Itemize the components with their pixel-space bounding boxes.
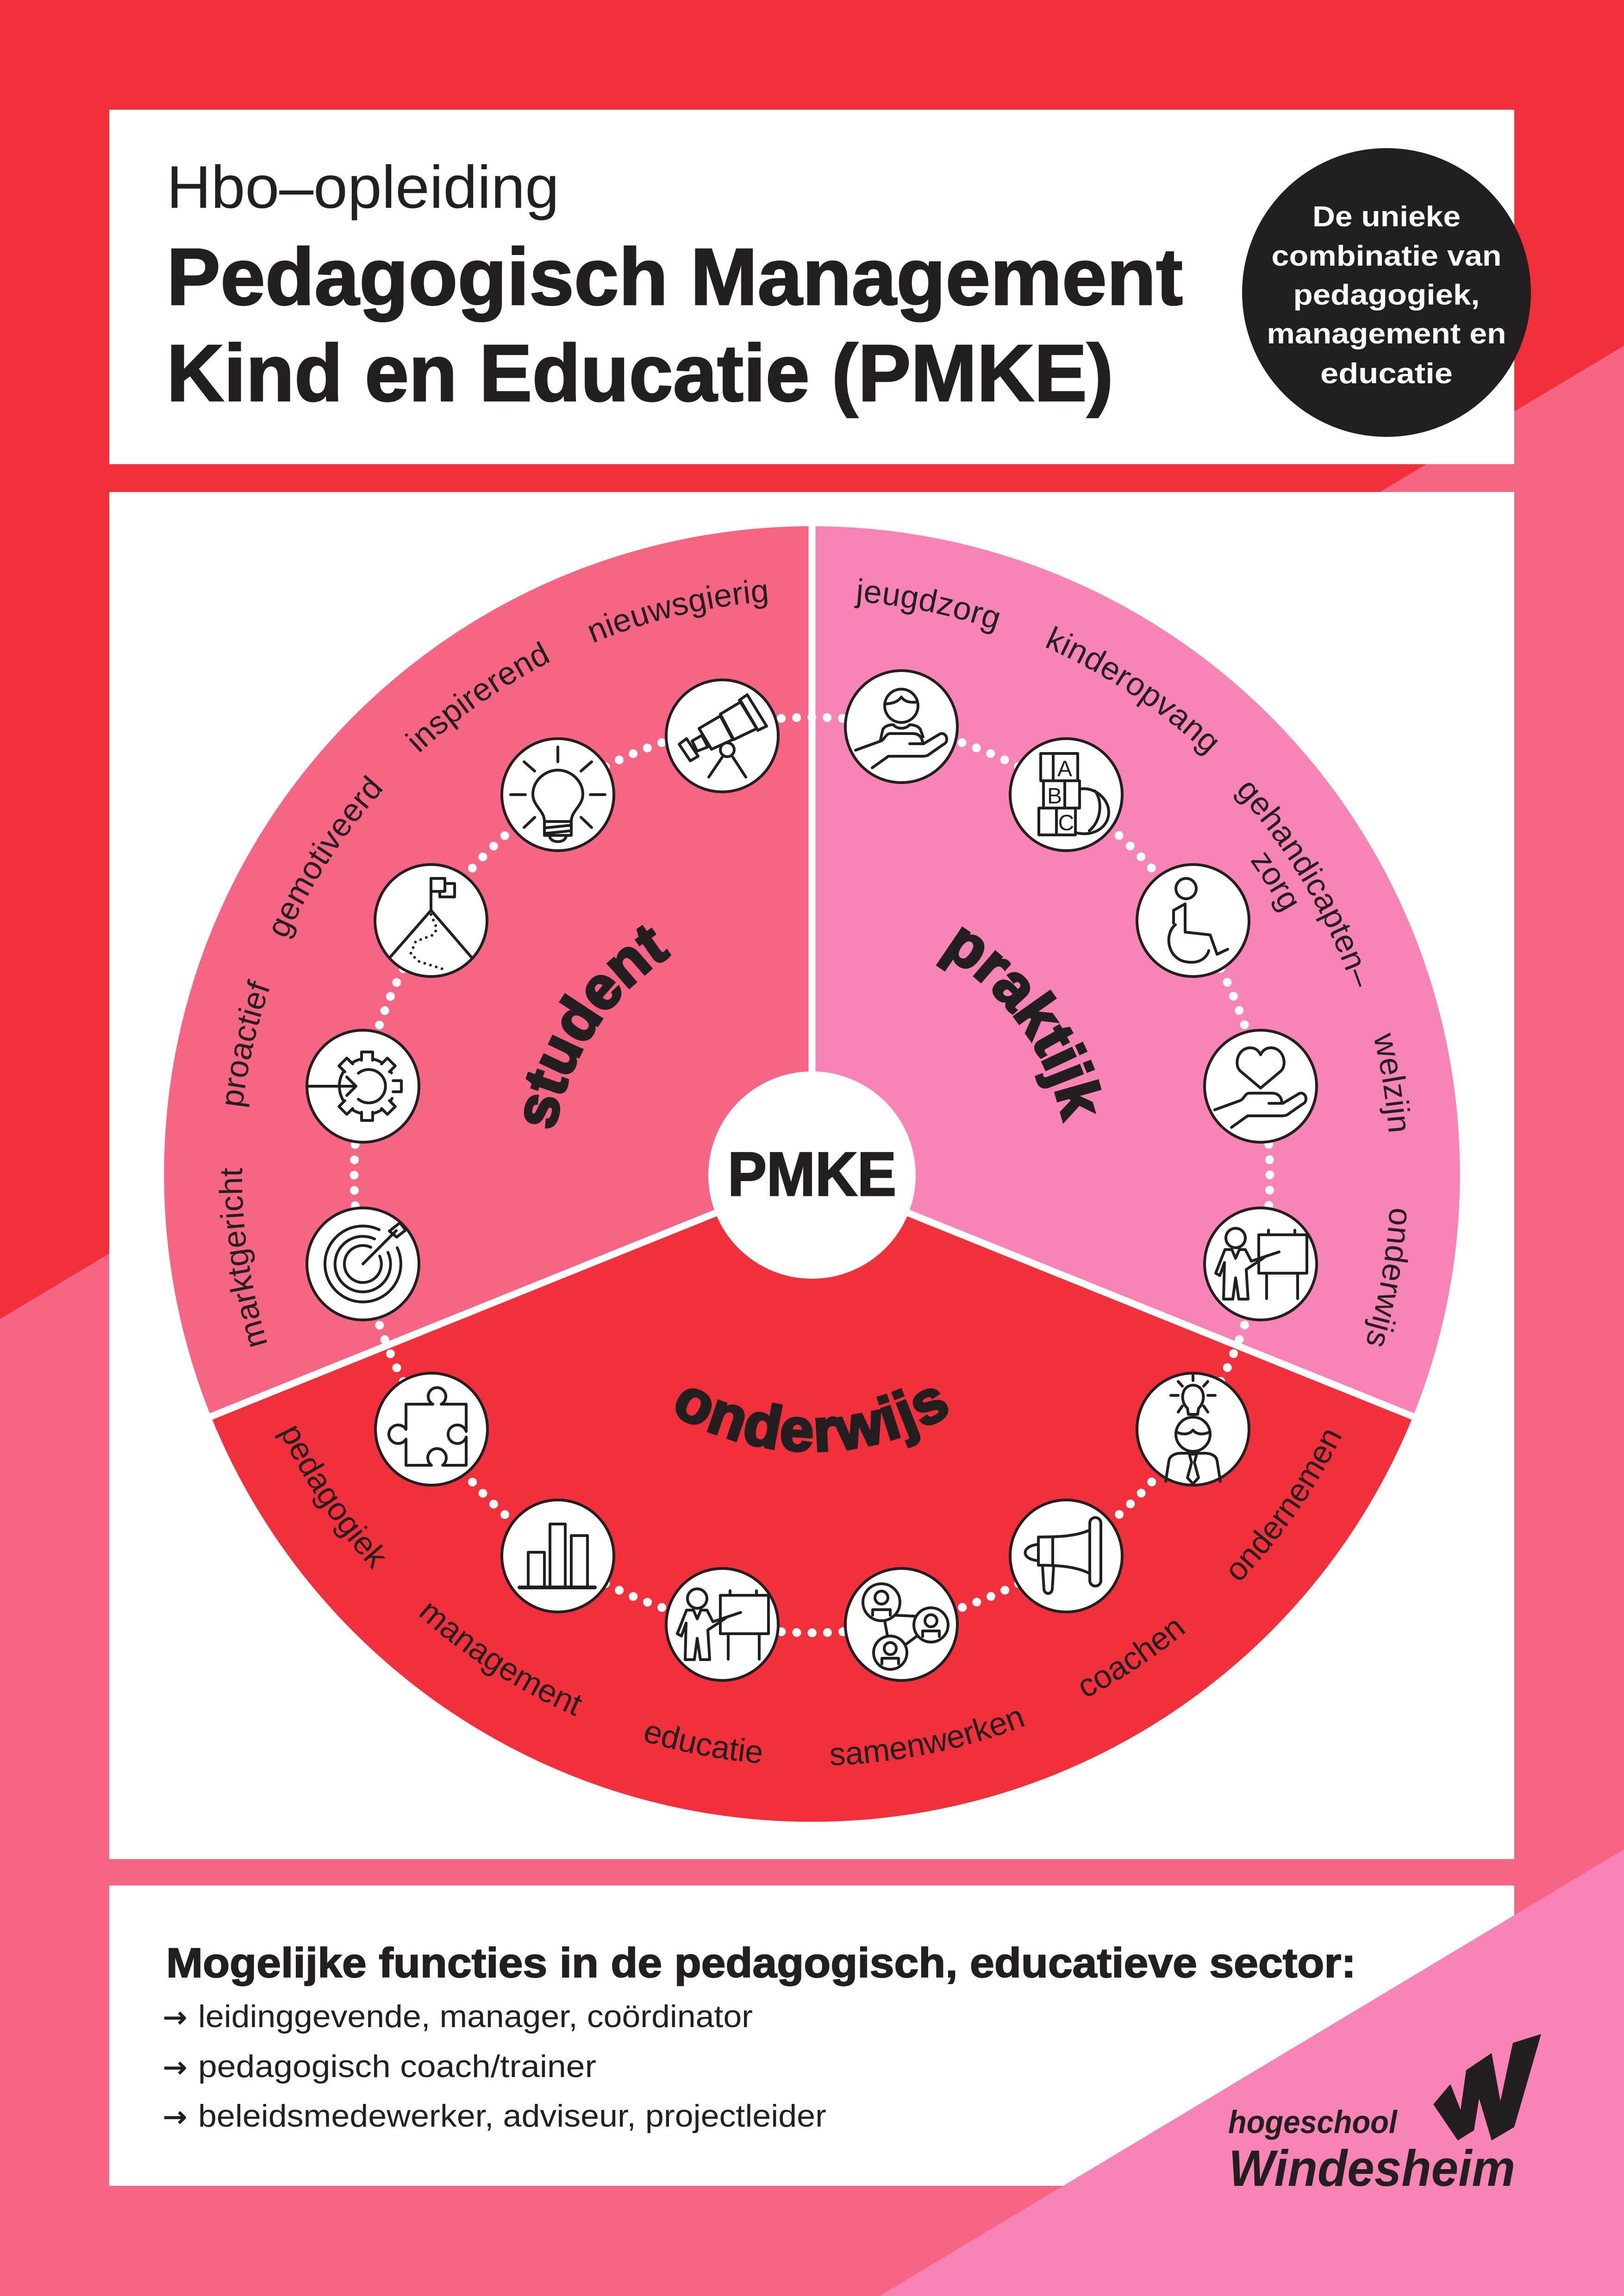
logo wordmark: hogeschool	[1228, 2104, 1398, 2140]
labels: praktijk: onderwijs	[1359, 1207, 1419, 1352]
dotted ring	[354, 717, 1270, 1633]
callout: black circle: De unieke	[1312, 201, 1461, 233]
logo mark	[1433, 2034, 1541, 2140]
logo wordmark	[1228, 2104, 1515, 2197]
functions list	[163, 1999, 826, 2134]
icon: alphabet blocks: A	[1057, 757, 1072, 781]
callout: black circle: pedagogiek,	[1293, 279, 1480, 311]
icon: mountain flag	[375, 865, 487, 977]
icon: entrepreneur with idea	[1137, 1373, 1249, 1485]
functions list: →	[163, 2050, 187, 2084]
icon: target	[307, 1208, 419, 1320]
background: pink corner	[880, 1849, 1624, 2296]
labels: onderwijs: samenwerken	[829, 1698, 1029, 1773]
centre: PMKE: PMKE	[728, 1140, 896, 1209]
labels: student: nieuwsgierig	[582, 572, 770, 650]
icon: alphabet blocks	[1010, 739, 1122, 851]
callout: black circle: educatie	[1320, 358, 1453, 390]
heading: onderwijs: onderwijs	[664, 1364, 960, 1464]
labels: praktijk: gehandicapten–	[1230, 772, 1380, 992]
icon: person in hand	[845, 671, 957, 783]
heading: student: student	[500, 910, 678, 1134]
icon: alphabet blocks: C	[1058, 811, 1074, 835]
logo: hogeschool Windesheim	[1228, 2034, 1541, 2197]
icon: megaphone	[1010, 1500, 1122, 1612]
labels: praktijk	[854, 572, 1419, 1352]
labels: onderwijs: educatie	[640, 1712, 765, 1770]
functions list: pedagogisch coach/trainer	[198, 2049, 596, 2084]
centre: PMKE	[708, 1071, 916, 1279]
title	[167, 231, 1183, 418]
labels: onderwijs	[274, 1418, 1349, 1773]
sector: praktijk	[812, 526, 1460, 1417]
subtitle: Hbo–opleiding	[167, 153, 559, 221]
functions list: leidinggevende, manager, coördinator	[198, 1999, 753, 2034]
labels: student: inspirerend	[399, 635, 555, 759]
sector: student	[164, 526, 812, 1417]
labels: student: proactief	[213, 977, 277, 1109]
callout: black circle: management en	[1267, 318, 1506, 350]
labels: student: marktgericht	[213, 1168, 275, 1352]
labels: praktijk: zorg	[1244, 844, 1309, 916]
functions list: →	[163, 2100, 187, 2134]
icon: puzzle piece	[375, 1373, 487, 1485]
icon: telescope	[666, 680, 778, 792]
wheel chart	[164, 518, 1460, 1822]
labels: student	[213, 572, 770, 1352]
callout: black circle	[1242, 148, 1531, 437]
labels: praktijk: welzijn	[1367, 1029, 1418, 1134]
panel: wheel background	[109, 492, 1514, 1859]
panel: functions	[109, 1885, 1514, 2186]
labels: onderwijs: coachen	[1071, 1609, 1192, 1705]
icon: lightbulb	[502, 739, 614, 851]
labels: student: gemotiveerd	[259, 769, 390, 942]
title: Pedagogisch Management	[167, 231, 1183, 322]
title: Kind en Educatie (PMKE)	[167, 328, 1113, 418]
heading: praktijk: praktijk	[934, 907, 1116, 1125]
icon: teacher	[1205, 1208, 1317, 1320]
sector: onderwijs	[211, 1174, 1413, 1822]
icon: gear with arrow	[307, 1030, 419, 1142]
icon: bar chart	[502, 1500, 614, 1612]
labels: onderwijs: ondernemen	[1218, 1422, 1349, 1588]
functions list: beleidsmedewerker, adviseur, projectleider	[198, 2098, 826, 2134]
icon: teacher at board	[666, 1568, 778, 1680]
callout: black circle: combinatie van	[1271, 240, 1502, 272]
functions heading: Mogelijke functies in de pedagogisch, educatieve sector:	[166, 1940, 1356, 1986]
labels: onderwijs: management	[412, 1593, 587, 1723]
labels: onderwijs: pedagogiek	[274, 1418, 395, 1575]
logo wordmark: Windesheim	[1229, 2140, 1515, 2197]
functions list: →	[163, 2000, 187, 2034]
icon: wheelchair	[1137, 865, 1249, 977]
labels: praktijk: jeugdzorg	[854, 572, 1006, 637]
icon: alphabet blocks: B	[1047, 784, 1062, 809]
panel: header	[109, 110, 1514, 464]
icon: heart in hand	[1205, 1030, 1317, 1142]
icon: network of people	[845, 1568, 957, 1680]
labels: praktijk: kinderopvang	[1041, 620, 1228, 760]
